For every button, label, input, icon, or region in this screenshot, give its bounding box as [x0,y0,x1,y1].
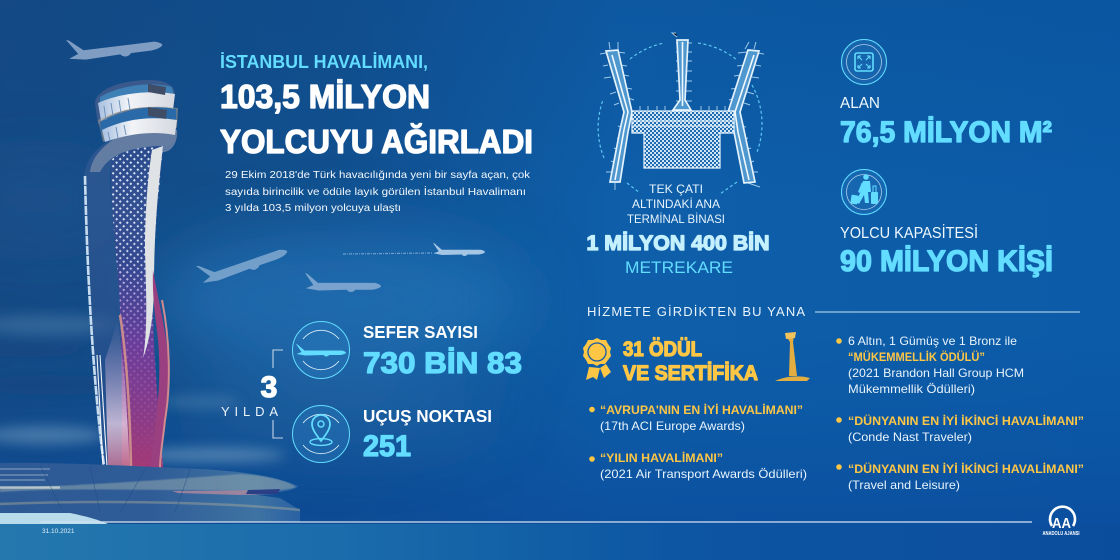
red ribbon [150,270,169,468]
icon: location circle [292,406,350,462]
award: Conde Nast [836,415,1084,444]
3 years label: YILDA [221,404,278,419]
stat: capacity: 90 MİLYON KİŞİ [840,245,1053,278]
intro paragraph [225,169,531,214]
award: Europe: “AVRUPA'NIN EN İYİ HAVALİMANI” [600,404,803,417]
awards heading: 31 ÖDÜL [623,338,702,361]
award: Travel and Leisure: (Travel and Leisure) [848,478,960,492]
airplane mid left [196,236,289,288]
award: Conde Nast: (Conde Nast Traveler) [848,430,972,444]
awards heading [623,338,758,385]
stat: flights [363,322,522,380]
intro paragraph: 29 Ekim 2018'de Türk havacılığında yeni bir sayfa açan, çok [225,169,531,181]
tower head [95,80,178,142]
award: excellence: (2021 Brandon Hall Group HCM [848,366,1024,380]
stat: destinations [363,406,492,463]
stat: area [840,95,1052,149]
title: 103,5 MİLYON [220,78,430,115]
title [220,51,533,160]
award: Europe: (17th ACI Europe Awards) [600,419,745,433]
stem dots [111,146,163,468]
icon: passenger [842,170,886,214]
award: year: “YILIN HAVALİMANI” [600,452,723,465]
terminal plan [598,33,764,194]
stat: destinations: UÇUŞ NOKTASI [363,406,492,426]
outer ribbon [84,124,177,468]
icon: plane circle [292,322,350,378]
airplane mid centre [305,273,381,292]
icon: tower trophy [775,332,810,381]
award: Travel and Leisure: “DÜNYANIN EN İYİ İKİNCİ HAVALİMANI” [848,463,1084,476]
ticks [600,33,764,190]
award: year [589,452,807,481]
logo: Anadolu Ajansı [1042,507,1080,537]
footer line and date: 31.10.2021 [42,528,75,535]
award: excellence: 6 Altın, 1 Gümüş ve 1 Bronz ile [848,334,1017,348]
terminal area value: 1 MİLYON 400 BİN [586,232,770,255]
white stripe [85,176,104,466]
stat: destinations: 251 [363,430,411,463]
white edge of stem [143,146,163,358]
airplane top left [66,28,163,64]
award: year: (2021 Air Transport Awards Ödülleri) [600,467,807,481]
lower glow [105,320,130,468]
title: YOLCUYU AĞIRLADI [220,123,533,160]
intro paragraph: 3 yılda 103,5 milyon yolcuya ulaştı [225,202,401,214]
stat: area: 76,5 MİLYON M² [840,116,1052,149]
stat: capacity: YOLCU KAPASİTESİ [840,224,978,242]
piers [606,40,759,183]
award: excellence: “MÜKEMMELLİK ÖDÜLÜ” [848,351,985,364]
title: İSTANBUL HAVALİMANI, [220,51,428,72]
terminal label: TEK ÇATI [649,182,703,196]
terminal label [627,182,725,226]
terminal area value: METREKARE [625,258,733,277]
stat: capacity [840,224,1053,278]
airplane with contrail [343,243,485,256]
stat: area: ALAN [840,95,880,112]
icon: area [842,40,886,84]
3 years label: 3 [261,371,277,404]
intro paragraph: sayıda birincilik ve ödüle layık görülen İstanbul Havalimanı [225,185,526,198]
award: excellence [836,334,1024,396]
icon: medal [583,338,611,380]
control tower [84,80,178,468]
terminal label: TERMİNAL BİNASI [627,212,725,226]
water [0,524,1120,560]
logo: Anadolu Ajansı: AA [1052,515,1071,532]
section heading: HİZMETE GİRDİKTEN BU YANA [587,304,805,319]
award: Europe [589,404,803,433]
dashed circle [598,43,762,194]
award: Travel and Leisure [836,463,1084,492]
terminal label: ALTINDAKİ ANA [632,197,720,211]
awards heading: VE SERTİFİKA [623,362,758,385]
logo: Anadolu Ajansı: ANADOLU AJANSI [1042,531,1080,537]
stat: flights: 730 BİN 83 [363,347,522,380]
award: Conde Nast: “DÜNYANIN EN İYİ İKİNCİ HAVALİMANI” [848,415,1084,428]
3 years label [221,350,283,438]
terminal area value [586,232,770,277]
award: excellence: Mükemmellik Ödülleri) [848,382,975,396]
terminal building roof [0,463,300,526]
stat: flights: SEFER SAYISI [363,322,478,342]
main terminal hall [632,111,734,168]
